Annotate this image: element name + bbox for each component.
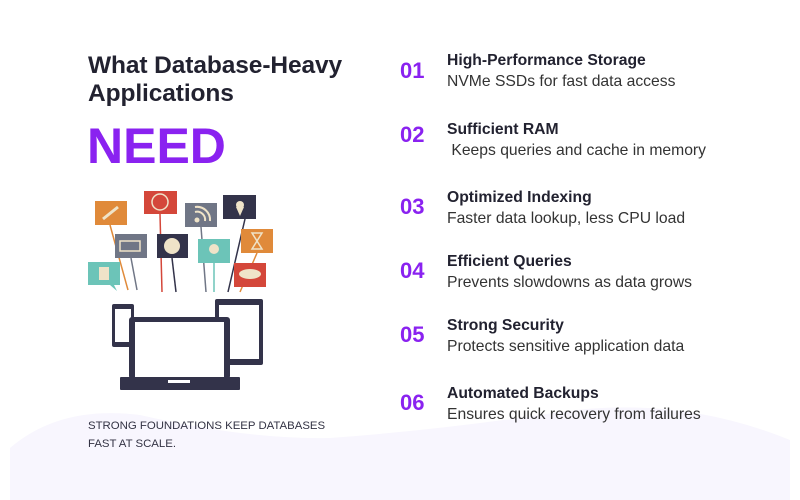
text: Prevents slowdowns as data grows — [447, 274, 692, 291]
footer text: FAST AT SCALE. — [88, 438, 176, 450]
text: Protects sensitive application data — [447, 338, 684, 355]
devices — [112, 299, 263, 390]
text: 04 — [400, 258, 424, 283]
item 04 — [400, 253, 692, 291]
icon: rss — [185, 203, 217, 227]
item 03 — [400, 189, 685, 227]
icon: clock — [144, 191, 177, 214]
icon: trash — [88, 262, 120, 291]
text: Automated Backups — [447, 385, 599, 402]
text: 05 — [400, 322, 424, 347]
item 02 — [400, 121, 706, 159]
text: Faster data lookup, less CPU load — [447, 210, 685, 227]
footer text — [88, 420, 325, 450]
text: 06 — [400, 390, 424, 415]
item 01 — [400, 52, 675, 90]
icon: hourglass — [241, 229, 273, 253]
icon: webcam — [198, 239, 230, 263]
text: NVMe SSDs for fast data access — [447, 73, 675, 90]
text: Keeps queries and cache in memory — [451, 142, 706, 159]
icon: ice cream — [223, 195, 256, 219]
text: 02 — [400, 122, 424, 147]
text: 01 — [400, 58, 424, 83]
heading: NEED: NEED — [87, 118, 226, 174]
text: Sufficient RAM — [447, 121, 559, 138]
illustration: devices with app icons — [88, 191, 273, 390]
text: Ensures quick recovery from failures — [447, 406, 701, 423]
footer text: STRONG FOUNDATIONS KEEP DATABASES — [88, 420, 325, 432]
text: Optimized Indexing — [447, 189, 592, 206]
icon: globe — [157, 234, 188, 258]
item 05 — [400, 317, 684, 355]
icon: chat — [115, 234, 147, 258]
text: Strong Security — [447, 317, 564, 334]
icon: cloud — [234, 263, 266, 287]
item 06 — [400, 385, 701, 423]
title: Applications — [88, 80, 234, 107]
title: What Database-Heavy — [88, 52, 342, 79]
text: 03 — [400, 194, 424, 219]
text: High-Performance Storage — [447, 52, 646, 69]
text: Efficient Queries — [447, 253, 572, 270]
icon: pencil — [95, 201, 127, 225]
title — [88, 52, 342, 107]
